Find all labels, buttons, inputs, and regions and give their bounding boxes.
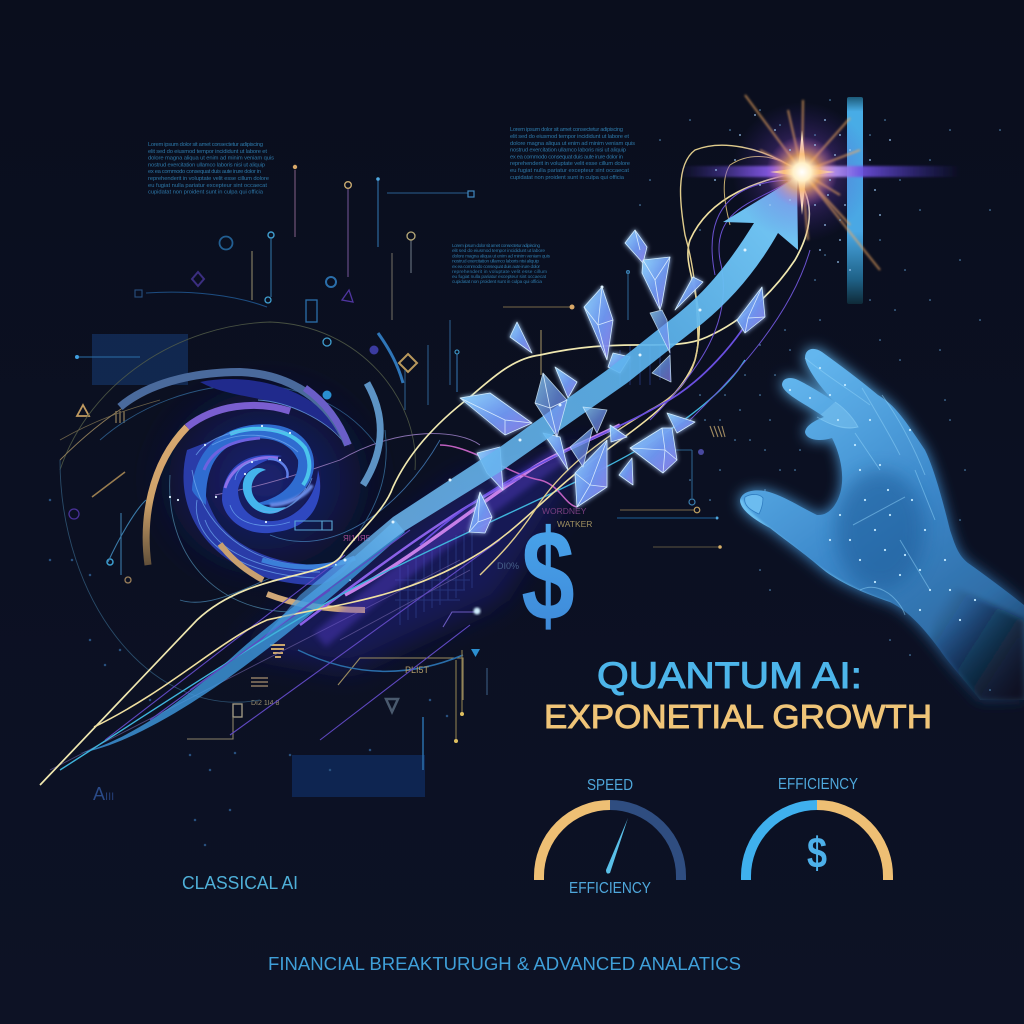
- label: classical ai: CLASSICAL AI: [182, 873, 298, 893]
- sub label: EFFICIENCY: [569, 880, 651, 897]
- lower-left dim particles: [50, 500, 447, 845]
- text block: middle: cupidatat non proident sunt in culpa qui officia: [452, 279, 542, 285]
- small data label word gold: WATKER: [557, 519, 592, 529]
- dollar icon: $: [807, 829, 827, 878]
- growth arrow: [262, 177, 798, 640]
- small data label pink: ЯI1 IЯ5: [343, 534, 371, 543]
- flare particles: [715, 115, 890, 270]
- purple loops around arrow: [650, 172, 810, 420]
- cyan highlight: [230, 429, 309, 485]
- star spikes: [770, 130, 835, 215]
- arrow light sparks: [345, 250, 745, 560]
- text block: middle: [452, 243, 551, 285]
- footer caption: FINANCIAL BREAKTURUGH & ADVANCED ANALATICS: [268, 953, 741, 974]
- flare core: [766, 136, 838, 208]
- icon: grey triangle: [386, 699, 398, 712]
- glowing node: [474, 608, 480, 614]
- title line two: EXPONETIAL GROWTH: [544, 698, 932, 735]
- text block: upper left: [148, 142, 274, 196]
- inner spiral: [222, 455, 320, 533]
- purple arc top: [187, 405, 290, 427]
- outer indigo crescent: [183, 438, 352, 585]
- bright blue sweep: [80, 520, 405, 753]
- cyan ribbon: [60, 360, 745, 770]
- title line one: QUANTUM AI:: [597, 655, 862, 696]
- violet ribbon: [300, 478, 520, 625]
- gauge label: SPEED: [587, 777, 633, 794]
- gold half: [817, 805, 888, 880]
- lower gold arc one: [220, 544, 263, 580]
- text block: upper left: eu fugiat nulla pariatur excepteur sint occaecat: [148, 183, 267, 189]
- hand: [740, 349, 1024, 700]
- text block: upper left: dolore magna aliqua ut enim ad minim veniam quis: [148, 156, 274, 162]
- text block: upper left: reprehenderit in voluptate velit esse cillum dolore: [148, 176, 269, 182]
- text block: upper centre: eu fugiat nulla pariatur excepteur sint occaecat: [510, 168, 629, 174]
- text block: upper centre: Lorem ipsum dolor sit amet consectetur adipiscing: [510, 127, 623, 133]
- faint label: AIII: [93, 784, 114, 804]
- text block: upper centre: reprehenderit in voluptate velit esse cillum dolore: [510, 161, 630, 167]
- needle: [606, 818, 628, 874]
- horizontal streak: [680, 166, 960, 177]
- rays: [745, 95, 880, 270]
- gold line S curve: [94, 172, 800, 727]
- gold line long: [40, 170, 809, 785]
- inner loop: [724, 156, 800, 225]
- text block: upper left: elit sed do eiusmod tempor incididunt ut labore et: [148, 149, 267, 155]
- thin orbit lines: [50, 322, 480, 770]
- swirl sparks: [170, 426, 350, 580]
- small data label gold: PLI5T: [405, 665, 430, 675]
- gauge: efficiency: [746, 776, 888, 880]
- rim spray: [270, 485, 312, 505]
- text block: upper left: Lorem ipsum dolor sit amet consectetur adipiscing: [148, 142, 263, 148]
- text block: upper left: nostrud exercitation ullamco laboris nisi ut aliquip: [148, 162, 265, 168]
- text block: upper centre: nostrud exercitation ullamco laboris nisi ut aliquip: [510, 148, 626, 154]
- purple glow band: [320, 455, 560, 640]
- inner spiral purple: [225, 457, 278, 488]
- circuit pins and icons: [69, 165, 725, 770]
- finger creases: [805, 358, 935, 615]
- lower gold arc two: [267, 594, 365, 610]
- swirl: [120, 333, 403, 610]
- text block: upper centre: elit sed do eiusmod tempor incididunt ut labore et: [510, 134, 629, 140]
- hand silhouette: [740, 349, 1024, 700]
- blue half: [746, 805, 817, 880]
- nebula glow behind swirl and stream: [145, 370, 600, 670]
- text block: upper centre: dolore magna aliqua ut enim ad minim veniam quis: [510, 141, 635, 147]
- gray-blue outer arc: [120, 372, 348, 445]
- pink ribbon: [345, 425, 620, 595]
- navy half: [610, 805, 681, 880]
- upper indigo crescent: [200, 379, 350, 447]
- icon: falling triangle: [471, 649, 480, 657]
- icon: stacked bars: [270, 645, 285, 657]
- gold and purple arc: [146, 427, 187, 565]
- starburst: [680, 95, 960, 270]
- spiral core: [243, 468, 286, 514]
- text block: middle: elit sed do eiusmod tempor incididunt ut labore: [452, 248, 545, 254]
- text block: middle: eu fugiat nulla pariatur excepteur sint occaecat: [452, 274, 547, 280]
- scattered particles: [640, 100, 1000, 690]
- text block: middle: dolore magna aliqua ut enim ad minim veniam quis: [452, 254, 551, 260]
- energy stream: [40, 145, 810, 785]
- panel: blue block upper left: [92, 334, 188, 385]
- text block: upper centre: ex ea commodo consequat duis aute irure dolor in: [510, 154, 623, 160]
- text block: middle: reprehenderit in voluptate velit esse cillum: [452, 269, 547, 275]
- curl tip: [268, 459, 288, 478]
- magenta wave: [440, 445, 577, 507]
- gold half: [539, 805, 610, 880]
- text block: middle: nostrud exercitation ullamco laboris nisi aliquip: [452, 258, 539, 264]
- text block: upper centre: [510, 127, 635, 181]
- data grid in stream: [395, 345, 670, 625]
- gold loop: [480, 145, 800, 575]
- gauge: speed: [539, 777, 681, 897]
- text block: upper left: ex ea commodo consequat duis aute irure dolor in: [148, 169, 261, 175]
- tag rectangle: [295, 521, 332, 530]
- panel: blue block lower: [292, 755, 425, 797]
- purple sweeps: [420, 300, 760, 545]
- crystals behind arrow: [460, 230, 765, 533]
- violet highlight: [204, 438, 260, 470]
- text block: middle: Lorem ipsum dolor sit amet consectetur adipiscing: [452, 243, 540, 249]
- vertical light bar: [847, 97, 863, 304]
- text block: upper centre: cupidatat non proident sunt in culpa qui officia: [510, 175, 625, 181]
- crystal facets: [460, 230, 765, 532]
- icon: stacked bars lower: [251, 678, 268, 686]
- swirl tail: [262, 558, 355, 567]
- small data label word: WORDNEY: [542, 506, 587, 516]
- hand constellation dots: [790, 368, 975, 620]
- top right arc: [378, 333, 403, 383]
- purple haze: [732, 102, 872, 242]
- text block: middle: ex ea commodo consequat duis aute irure dolor: [452, 264, 540, 270]
- title: [544, 655, 932, 735]
- purple diagonals: [105, 530, 500, 740]
- thumb nail: [745, 494, 763, 514]
- palm shading: [740, 402, 1024, 700]
- arc end purple: [305, 388, 348, 445]
- dollar sign: $: [521, 504, 575, 648]
- cyan crescent: [192, 424, 314, 505]
- crystals over arrow: [535, 310, 671, 467]
- small data label: DI2 1I4 8: [251, 700, 280, 707]
- gauge label: EFFICIENCY: [778, 776, 858, 793]
- small data label faint: DI0%: [497, 561, 519, 571]
- right arc: [363, 383, 380, 485]
- text block: upper left: cupidatat non proident sunt in culpa qui officia: [148, 190, 264, 196]
- streak lines through swirl: [192, 400, 342, 578]
